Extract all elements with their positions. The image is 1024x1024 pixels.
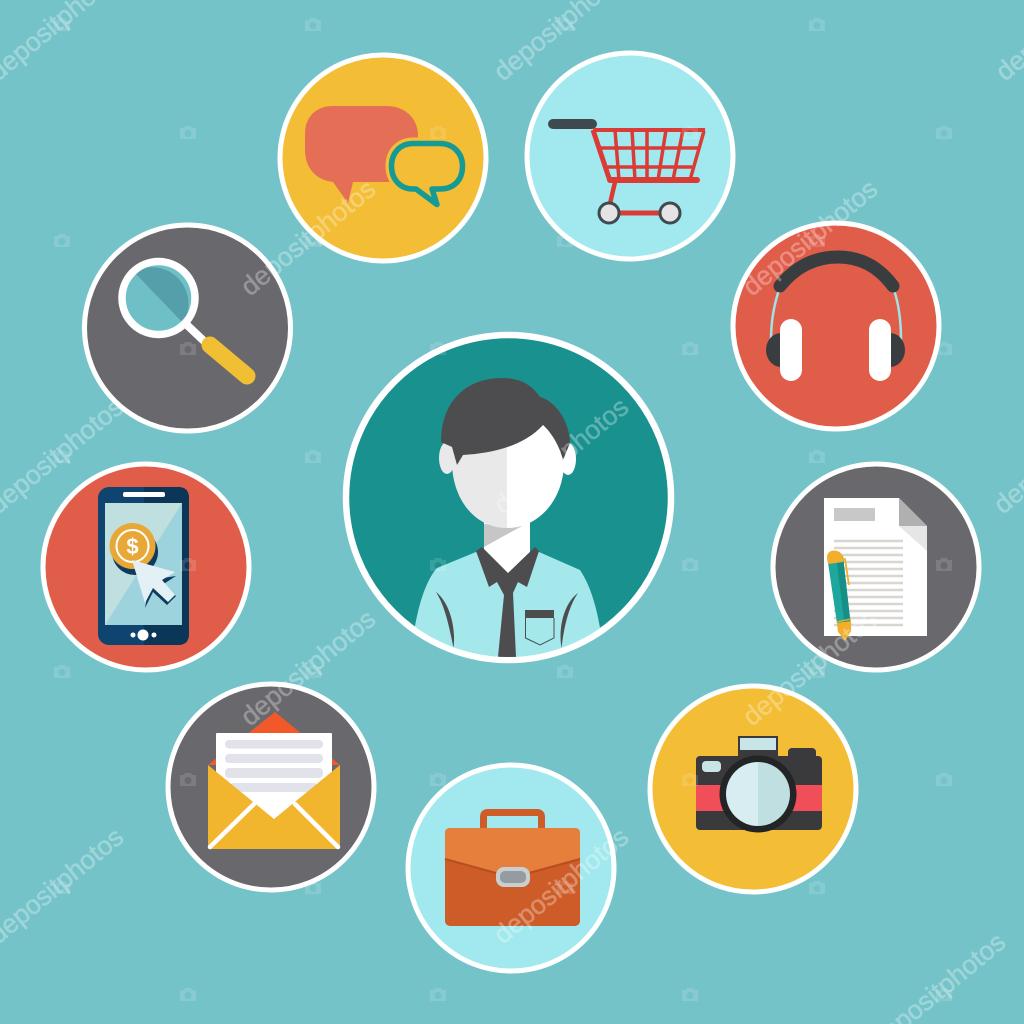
icon: headphones	[766, 257, 905, 381]
icon: dollar coin: $	[126, 534, 139, 559]
panel: camera	[650, 686, 856, 892]
panel: envelope	[168, 684, 374, 890]
icon: small speech bubble	[392, 144, 462, 204]
icon: large speech bubble	[305, 106, 418, 203]
icon: magnifying glass	[122, 262, 247, 376]
panel: central person	[346, 335, 671, 680]
icon: document	[824, 498, 927, 636]
person figure	[415, 378, 600, 680]
panel: briefcase	[408, 765, 614, 971]
panel: headphones	[733, 223, 939, 429]
panel: document and pen	[773, 464, 979, 670]
panel: smartphone	[43, 464, 249, 670]
icon: camera	[696, 736, 822, 832]
watermark: depositphotos	[488, 822, 634, 950]
icon: envelope	[208, 712, 340, 849]
panel: shopping cart	[527, 53, 733, 259]
icon: cursor arrow	[132, 560, 176, 608]
icon: pen	[827, 550, 851, 641]
watermark: depositphotos	[235, 604, 381, 732]
panel: chat bubbles	[280, 55, 486, 261]
watermark: depositphotos	[488, 392, 634, 520]
icon: smartphone	[98, 487, 189, 645]
panel: magnifier	[84, 225, 290, 431]
watermark: depositphotos	[235, 174, 381, 302]
icon: briefcase	[445, 812, 580, 926]
watermark: depositphotos	[737, 604, 883, 732]
icon: dollar coin	[110, 523, 158, 575]
watermark: depositphotos	[737, 174, 883, 302]
icon: cart	[548, 119, 705, 223]
